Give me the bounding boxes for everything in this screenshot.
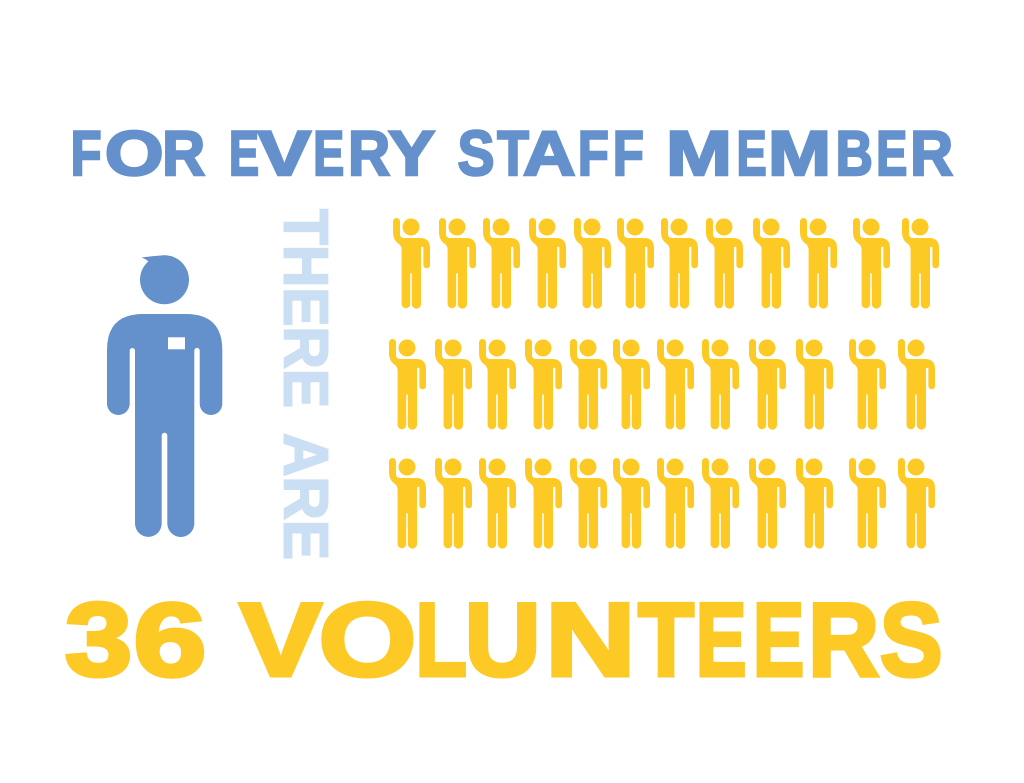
heading: for every staff member: A: [523, 119, 576, 189]
heading: for every staff member: F: [613, 119, 644, 189]
volunteers row 3: [389, 458, 935, 549]
heading: for every staff member: E: [876, 119, 907, 189]
heading: 36 volunteers: U: [465, 583, 541, 699]
heading: 36 volunteers: S: [880, 583, 942, 699]
vertical text: there are: THERE: [270, 209, 340, 408]
heading: for every staff member: E: [737, 119, 767, 189]
heading: 36 volunteers: R: [808, 583, 879, 699]
heading: 36 volunteers: 6: [134, 583, 206, 699]
heading: for every staff member: F: [578, 119, 609, 189]
heading: for every staff member: R: [348, 119, 390, 189]
heading: for every staff member: M: [768, 119, 831, 189]
volunteers row 1: [393, 218, 939, 309]
heading: for every staff member: F: [71, 119, 102, 189]
heading: 36 volunteers: E: [753, 583, 804, 699]
heading: for every staff member: T: [497, 119, 529, 189]
heading: for every staff member: V: [258, 119, 311, 189]
heading: for every staff member: E: [313, 119, 344, 189]
heading: 36 volunteers: 3: [65, 583, 132, 699]
icon: staff member with name badge: [107, 255, 222, 537]
heading: for every staff member: E: [229, 119, 259, 189]
heading: 36 volunteers: N: [545, 583, 635, 699]
heading: for every staff member: R: [910, 119, 953, 189]
heading: for every staff member: S: [458, 119, 494, 189]
heading: 36 volunteers: L: [415, 583, 467, 699]
volunteers row 2: [389, 339, 935, 430]
heading: for every staff member: M: [666, 119, 732, 189]
vertical text: there are: ARE: [270, 433, 340, 560]
heading: 36 volunteers: O: [319, 583, 416, 699]
heading: 36 volunteers: V: [240, 583, 322, 699]
heading: for every staff member: R: [162, 119, 205, 189]
heading: for every staff member: Y: [388, 119, 435, 189]
vertical text: there are: [270, 209, 340, 560]
heading: for every staff member: O: [105, 119, 164, 189]
heading: 36 volunteers: E: [696, 583, 746, 699]
heading: for every staff member: B: [836, 119, 873, 189]
heading: 36 volunteers: T: [638, 583, 694, 699]
